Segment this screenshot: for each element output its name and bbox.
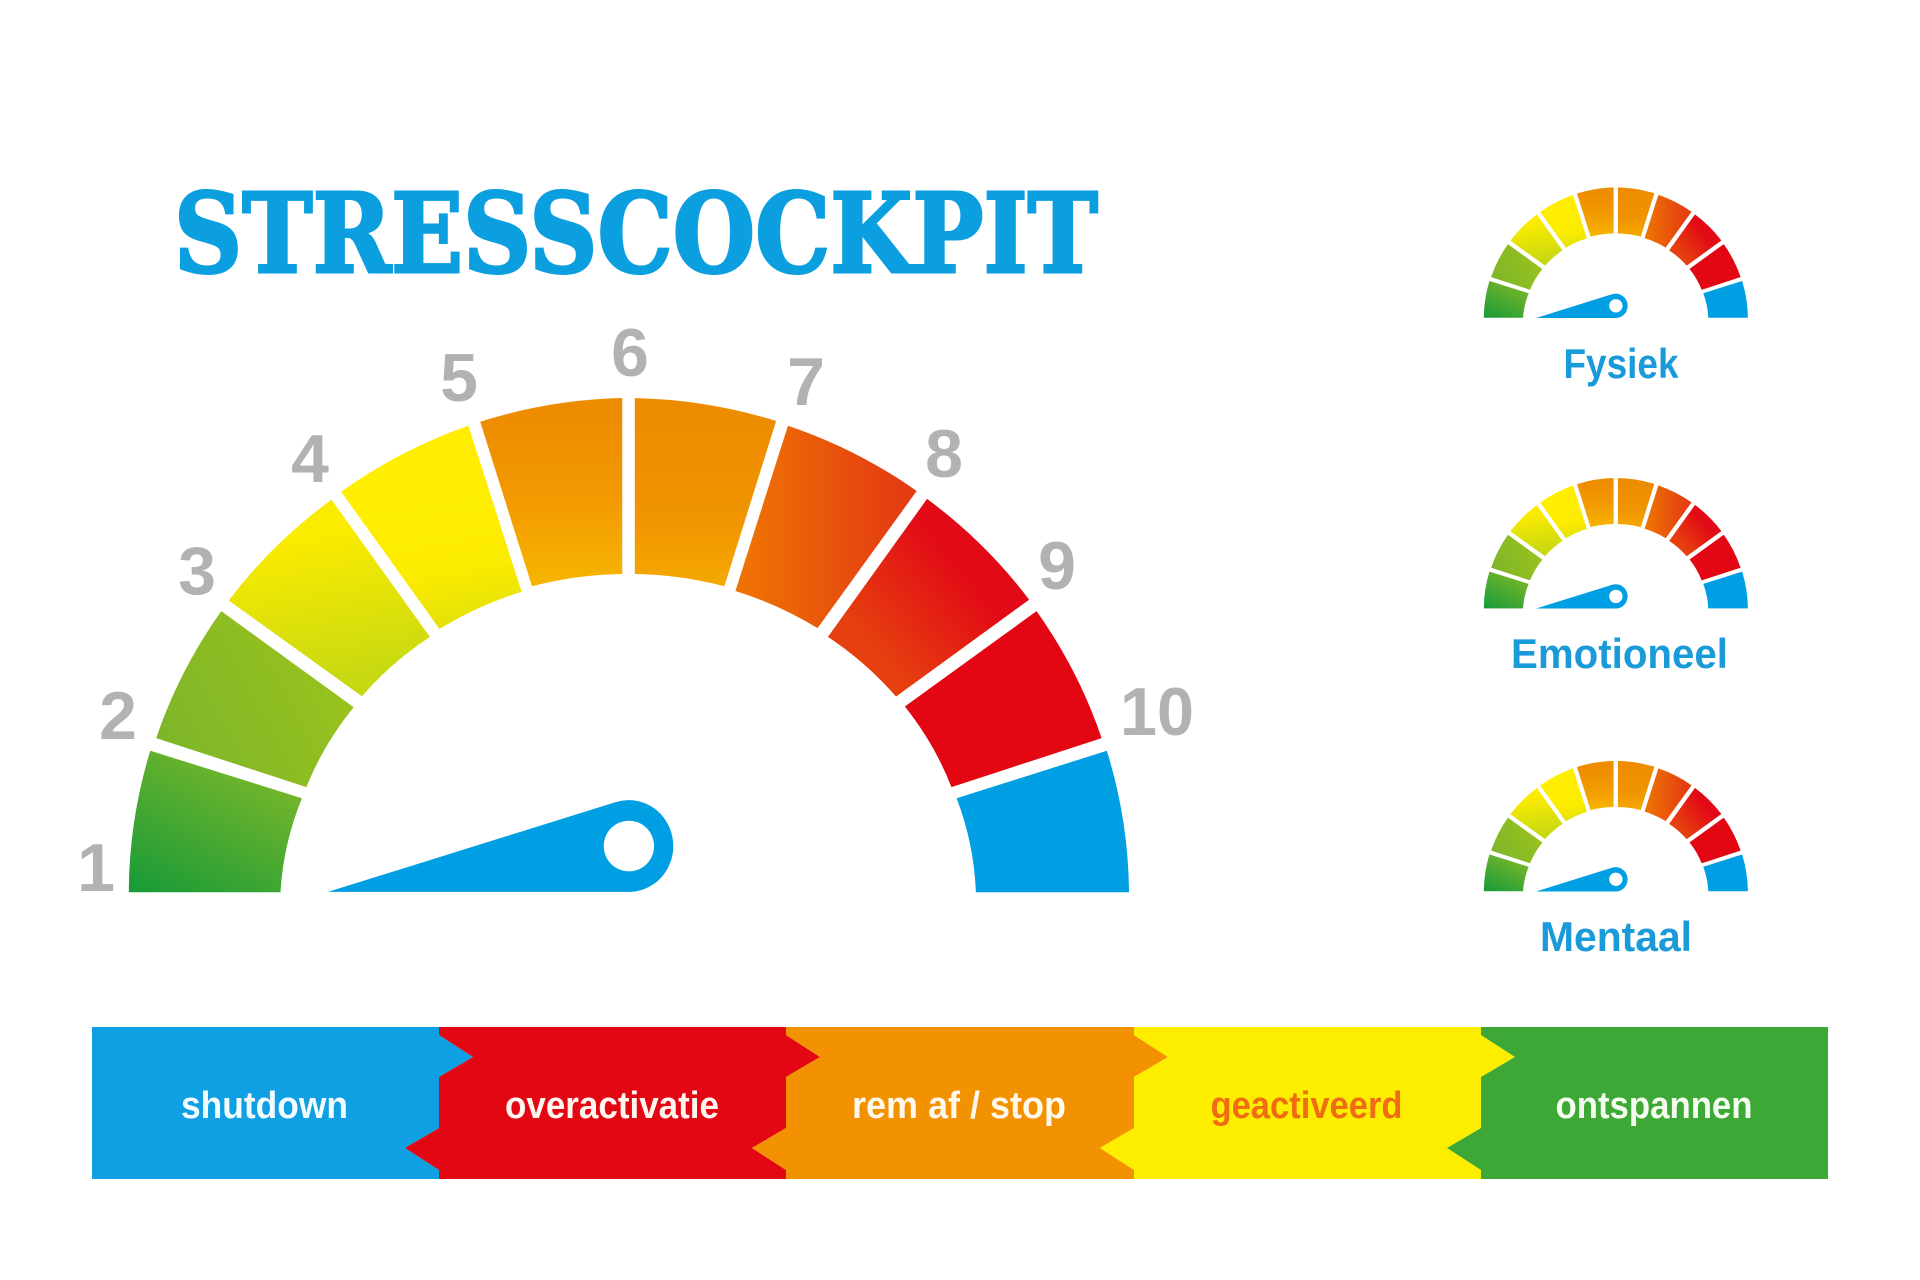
label: Fysiek: Fysiek — [1564, 340, 1679, 387]
segment 10 — [957, 751, 1129, 892]
segment 6 — [635, 398, 776, 586]
segment 7 — [735, 426, 917, 628]
number 8: 8 — [925, 416, 963, 492]
segment 2 — [156, 611, 354, 787]
zone: ontspannen — [1447, 1027, 1828, 1179]
gauge scale numbers — [77, 315, 1194, 906]
label: Emotioneel: Emotioneel — [1511, 630, 1728, 677]
number 6: 6 — [611, 315, 649, 391]
main gauge — [129, 398, 1129, 892]
segment 1 — [129, 751, 302, 892]
segment 4 — [341, 426, 522, 629]
segment 5 — [480, 398, 622, 586]
small gauge: Mentaal — [1483, 761, 1748, 960]
zone: rem af / stop: rem af / stop — [852, 1085, 1066, 1127]
number 7: 7 — [787, 344, 825, 420]
segment 8 — [828, 499, 1029, 697]
stress zones bar — [92, 1027, 1828, 1179]
zone: rem af / stop — [752, 1027, 1168, 1179]
number 10: 10 — [1120, 674, 1194, 750]
zone: overactivatie: overactivatie — [505, 1085, 719, 1127]
number 9: 9 — [1038, 528, 1076, 604]
zone: geactiveerd — [1100, 1027, 1515, 1179]
number 1: 1 — [77, 830, 115, 906]
small gauge: Emotioneel — [1483, 478, 1748, 677]
zone: geactiveerd: geactiveerd — [1210, 1085, 1402, 1127]
number 5: 5 — [440, 340, 478, 416]
needle — [328, 800, 673, 892]
segment 3 — [229, 500, 430, 696]
number 2: 2 — [99, 678, 137, 754]
number 4: 4 — [291, 421, 329, 497]
segment 9 — [905, 611, 1102, 787]
zone: overactivatie — [405, 1027, 820, 1179]
small gauge: Fysiek — [1483, 187, 1748, 387]
zone: shutdown: shutdown — [181, 1085, 348, 1127]
number 3: 3 — [178, 533, 216, 609]
label: Mentaal: Mentaal — [1540, 913, 1692, 960]
zone: shutdown — [92, 1027, 473, 1179]
title: STRESSCOCKPIT — [174, 169, 1098, 298]
zone: ontspannen: ontspannen — [1556, 1085, 1752, 1127]
